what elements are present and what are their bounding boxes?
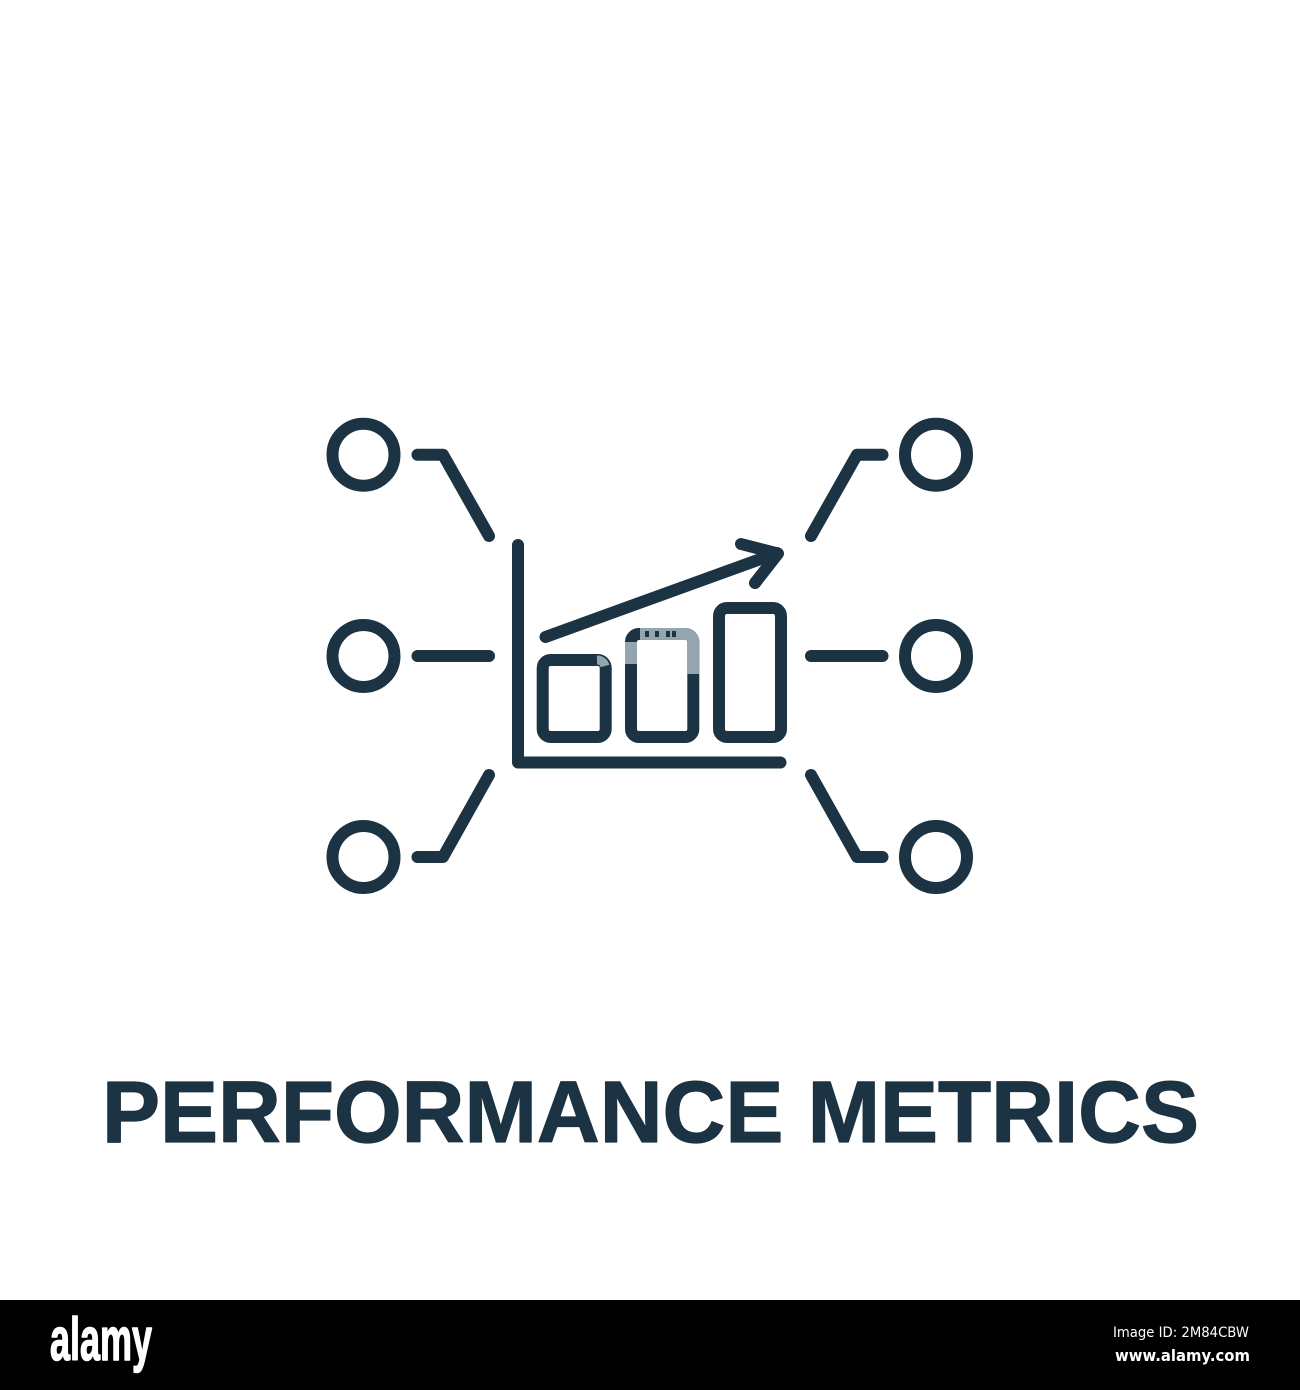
- connector: middle right: [811, 650, 882, 662]
- node: top right circle: [905, 424, 967, 486]
- bar: medium watermark marks: [647, 631, 674, 637]
- bar: short: [543, 660, 606, 737]
- bar: tall: [719, 608, 781, 737]
- connector: top left: [418, 455, 489, 536]
- node: bottom left circle: [332, 826, 394, 888]
- chart axes: [518, 545, 780, 762]
- footer logo: alamy: [50, 1306, 152, 1373]
- icon: performance metrics network: [332, 424, 967, 888]
- connector: top right: [811, 455, 882, 536]
- node: middle left circle: [332, 625, 394, 687]
- title: PERFORMANCE METRICS: [102, 1064, 1199, 1161]
- connector: bottom right: [811, 775, 882, 857]
- bar: short watermark tint: [597, 660, 605, 666]
- footer bar: [0, 1300, 1300, 1390]
- node: top left circle: [332, 424, 394, 486]
- website: www.alamy.com: [1115, 1346, 1250, 1365]
- connector: middle left: [418, 650, 489, 662]
- connector: bottom left: [418, 775, 489, 857]
- image id: Image ID: 2M84CBW: [1113, 1325, 1249, 1341]
- bar: medium: [631, 634, 693, 737]
- trend arrow: [546, 544, 778, 637]
- bar: medium watermark tint: [631, 634, 693, 674]
- node: middle right circle: [905, 625, 967, 687]
- node: bottom right circle: [905, 826, 967, 888]
